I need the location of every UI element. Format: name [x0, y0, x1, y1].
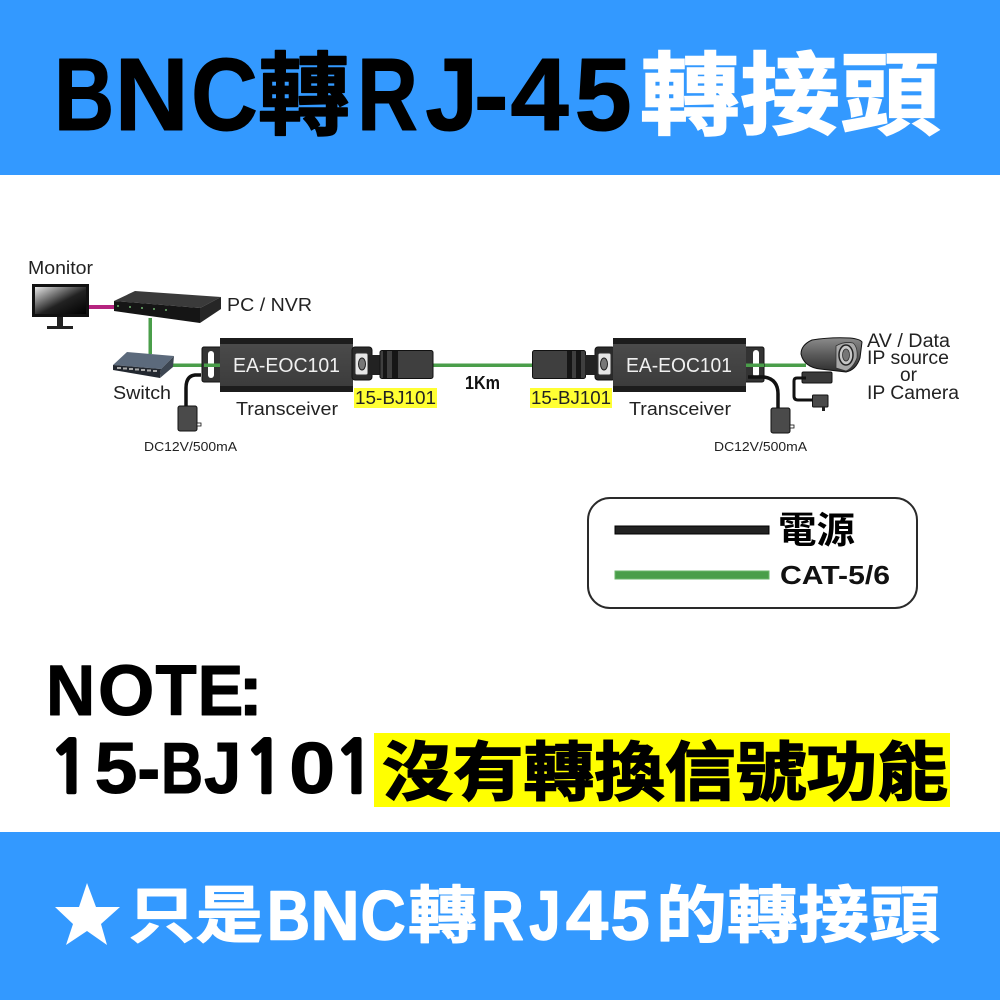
label: 1Km: 1Km	[465, 373, 500, 393]
label: Transceiver left: Transceiver	[236, 399, 338, 419]
power cable right	[748, 377, 778, 409]
model number: 1	[243, 732, 287, 804]
label: camera source: AV / Data	[867, 331, 950, 352]
slogan: 轉	[408, 882, 477, 951]
model number: B	[161, 728, 203, 808]
title: black part: B	[54, 37, 114, 152]
note heading: N	[46, 651, 95, 730]
label: DC12V right: DC12V/500mA	[714, 439, 807, 454]
title: black part: C	[191, 36, 258, 152]
label: Monitor: Monitor	[28, 258, 93, 278]
model number: J	[204, 728, 241, 809]
icon: PC / NVR	[114, 291, 221, 323]
15-BJ101 adapter right	[532, 350, 586, 378]
transceiver left	[202, 338, 353, 392]
note heading: E	[198, 651, 243, 730]
BNC barrel left	[352, 347, 380, 380]
slogan: 4	[566, 877, 609, 955]
cable: 1Km link	[432, 364, 534, 367]
label: camera source: IP source	[867, 348, 949, 369]
model number: 0	[289, 729, 335, 809]
note text	[48, 727, 950, 809]
slogan: 的轉接頭	[656, 882, 940, 951]
icon: power adapter left	[178, 406, 201, 431]
model number: 5	[95, 728, 137, 808]
model number	[48, 727, 377, 809]
cable: switch to transceiver	[170, 364, 222, 367]
note heading: T	[156, 650, 197, 730]
legend	[588, 498, 917, 608]
title: black part: N	[114, 37, 189, 152]
note heading: :	[238, 652, 263, 731]
power cable left	[186, 375, 201, 407]
label: 15-BJ101 right: 15-BJ101	[531, 388, 611, 408]
transceiver right	[613, 338, 764, 392]
bottom banner	[0, 832, 1000, 1000]
label: camera source: IP Camera	[867, 383, 959, 404]
model number: 1	[48, 732, 92, 804]
yellow highlight: 沒有轉換信號功能	[382, 737, 948, 809]
model number: 1	[333, 732, 377, 804]
slogan: 5	[611, 876, 650, 954]
icon: switch	[113, 352, 174, 378]
title: black part	[54, 36, 632, 153]
slogan: N	[310, 877, 360, 955]
right flange	[744, 347, 764, 382]
cable: monitor to NVR	[88, 305, 116, 309]
title: black part: J	[425, 36, 478, 152]
15-BJ101 adapter left	[380, 350, 433, 378]
icon: IP camera	[794, 338, 862, 411]
title: black part: 4	[510, 38, 569, 153]
label: PC / NVR: PC / NVR	[227, 295, 312, 315]
label: Switch: Switch	[113, 383, 171, 403]
model number: -	[137, 727, 160, 808]
label: 15-BJ101 left: 15-BJ101	[355, 388, 436, 408]
title: black part: -	[474, 38, 509, 153]
label: DC12V left: DC12V/500mA	[144, 439, 237, 454]
slogan: 只是	[128, 882, 263, 951]
icon: monitor	[32, 284, 89, 329]
cable: transceiver to camera	[744, 364, 806, 367]
legend line: CAT-5/6	[615, 571, 769, 579]
icon: power adapter right	[771, 408, 794, 433]
icon: star	[55, 883, 120, 945]
BNC barrel right	[585, 347, 615, 380]
top banner	[0, 0, 1000, 175]
legend line: power	[615, 526, 769, 534]
label: camera source: or	[900, 365, 918, 386]
cable: NVR to switch	[148, 318, 152, 354]
legend label: power: 電源	[778, 510, 855, 551]
model text: EA-EOC101	[626, 355, 732, 377]
slogan: B	[267, 876, 310, 955]
title: white part: 轉接頭	[640, 47, 940, 147]
body	[220, 338, 353, 392]
model text: EA-EOC101	[233, 355, 340, 377]
body	[613, 338, 746, 392]
legend label: CAT-5/6: CAT-5/6	[780, 560, 890, 590]
title: black part: R	[357, 37, 418, 152]
title: black part: 5	[574, 37, 632, 152]
note heading	[46, 650, 263, 731]
title: black part: 轉	[258, 47, 350, 147]
label: camera source	[867, 331, 959, 404]
left flange	[202, 347, 222, 382]
slogan: C	[361, 877, 406, 955]
label: Transceiver right: Transceiver	[629, 399, 731, 419]
slogan: J	[529, 878, 560, 955]
slogan	[128, 876, 940, 955]
note heading: O	[98, 652, 154, 731]
slogan: R	[481, 876, 524, 955]
network diagram	[28, 258, 959, 454]
